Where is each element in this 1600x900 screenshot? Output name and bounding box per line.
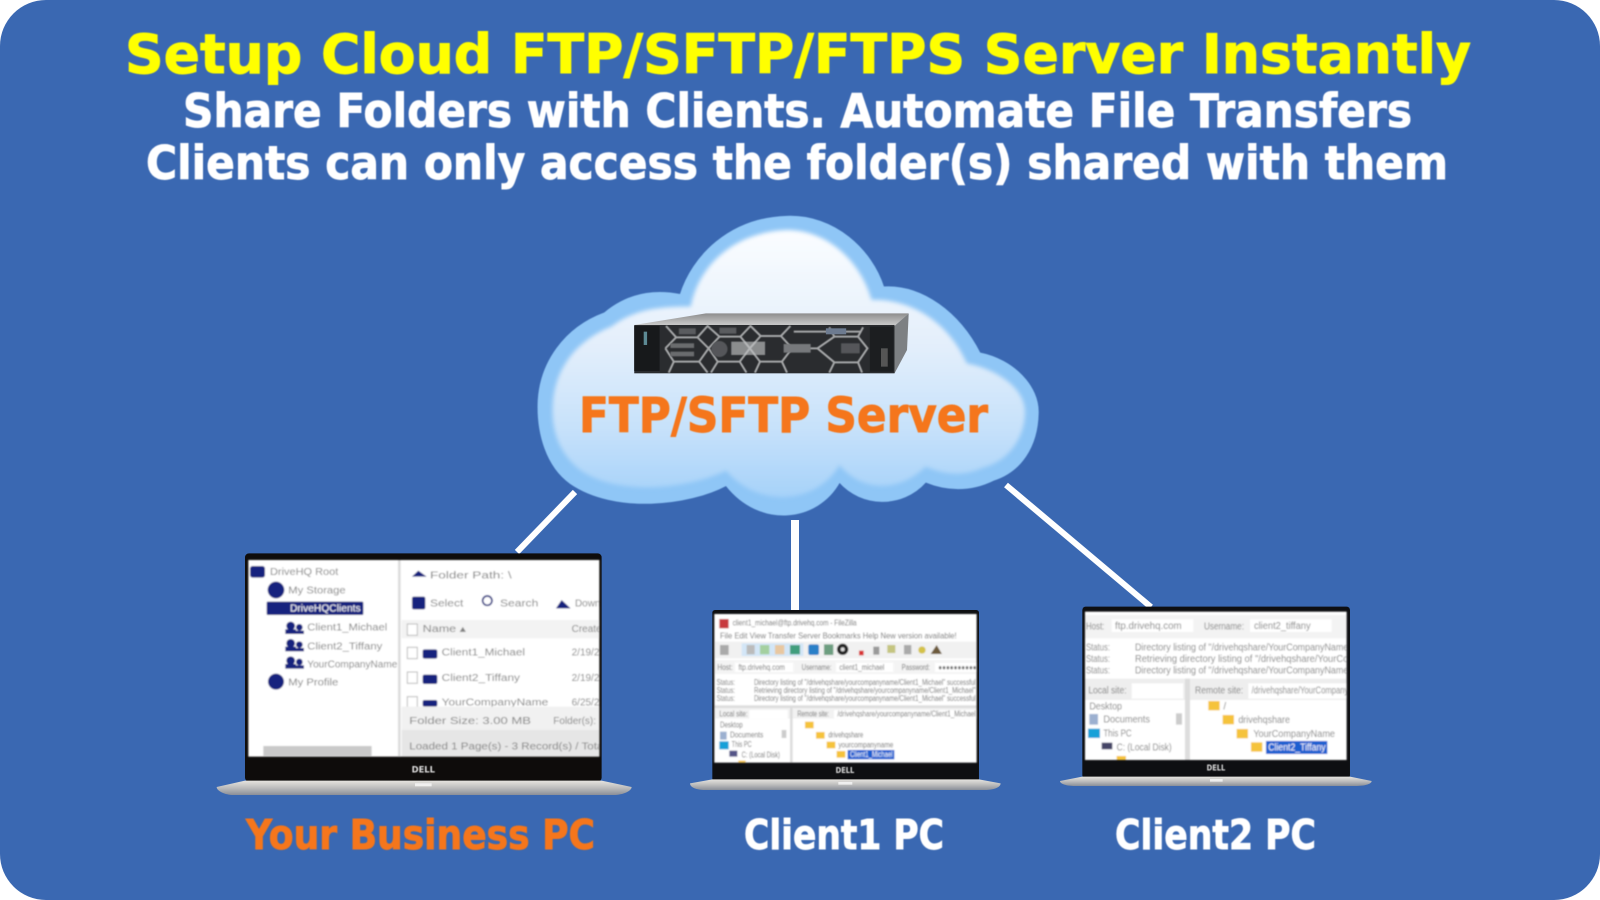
screen: FileZilla client2: This PC	[1103, 728, 1132, 739]
screen: FileZilla client1: Local site:	[719, 710, 748, 719]
connector: cloud to client2 PC	[1006, 485, 1151, 607]
screen: FileZilla client1: client1_michael	[839, 663, 884, 672]
screen: FileZilla client2: ftp.drivehq.com	[1115, 621, 1182, 632]
screen: FileZilla client2: Client2_Tiffany	[1268, 743, 1326, 754]
label: your business PC: Your Business PC	[245, 811, 595, 859]
screen: FileZilla client1: Remote site:	[797, 710, 829, 719]
screen: FileZilla client1: Client1_Michael	[850, 750, 893, 759]
subtitle: client access: Clients can only access the folder(s) shared with them	[146, 136, 1448, 190]
laptop body: DELL	[836, 766, 854, 775]
screen: FileZilla client2: Local site:	[1088, 685, 1127, 696]
laptop body	[690, 610, 1001, 790]
screen: FileZilla client2: Username:	[1204, 621, 1244, 632]
screen: FileZilla client1: Documents	[730, 730, 763, 739]
screen: file manager: YourCompanyName	[307, 659, 398, 670]
screen: FileZilla client2: Desktop	[1089, 701, 1122, 712]
screen: FileZilla client2: /	[1223, 701, 1226, 712]
screen: FileZilla client2	[1085, 612, 1349, 761]
screen: FileZilla client1: Retrieving directory listing of "/drivehqshare/yourcompanyname/Client1_Michael"	[754, 686, 976, 695]
cloud shape	[538, 217, 1038, 515]
laptop body	[217, 553, 632, 795]
screen: FileZilla client1: /drivehqshare/yourcompanyname/Client1_Michael	[837, 710, 976, 719]
title: Setup Cloud FTP/SFTP/FTPS Server Instantly	[125, 23, 1471, 86]
screen: FileZilla client2: C: (Local Disk)	[1117, 742, 1172, 753]
screen: FileZilla client2: client2_tiffany	[1254, 621, 1311, 632]
subtitle: share folders: Share Folders with Clients. Automate File Transfers	[183, 84, 1412, 138]
screen: FileZilla client2: Directory listing of "/drivehqshare/YourCompanyName	[1135, 665, 1349, 676]
screen: file manager: 2/19/2021	[572, 673, 616, 684]
laptop: your business PC	[217, 553, 632, 795]
screen: file manager: Loaded 1 Page(s) - 3 Record(s) / Total	[409, 741, 606, 752]
screen: FileZilla client1: Directory listing of "/drivehqshare/yourcompanyname/Client1_Michael" successful	[754, 678, 976, 687]
screen: FileZilla client2: Status:	[1086, 654, 1110, 665]
screen: file manager: YourCompanyName	[442, 698, 549, 709]
screen: FileZilla client1: ftp.drivehq.com	[738, 663, 785, 672]
screen: file manager: My Storage	[288, 585, 346, 596]
screen: file manager: Folder Path: \	[430, 570, 512, 581]
screen: FileZilla client2: /drivehqshare/YourCompany	[1252, 685, 1348, 696]
screen: FileZilla client2: Status:	[1086, 643, 1110, 654]
screen: FileZilla client1: yourcompanyname	[838, 740, 894, 749]
screen: file manager: Client1_Michael	[442, 648, 525, 659]
screen: FileZilla client1: Directory listing of "/drivehqshare/yourcompanyname/Client1_Michael" successful	[754, 694, 976, 703]
cloud with server	[538, 217, 1038, 515]
screen: FileZilla client1: Desktop	[720, 720, 743, 729]
laptop body	[1060, 607, 1372, 786]
screen: FileZilla client2: Remote site:	[1195, 685, 1243, 696]
screen: FileZilla client1: This PC	[732, 740, 752, 749]
screen: file manager: DriveHQ Root	[270, 567, 339, 578]
screen: file manager: DriveHQClients	[290, 604, 361, 615]
server	[634, 313, 909, 373]
screen: file manager: Search	[500, 599, 538, 610]
laptop body: DELL	[412, 765, 435, 775]
screen: file manager: Name ▴	[423, 624, 466, 635]
screen: FileZilla client1: Status:	[717, 678, 735, 687]
connector: cloud to business PC	[517, 492, 575, 552]
screen: file manager: 6/25/2021	[572, 698, 616, 709]
screen: FileZilla client1: drivehqshare	[828, 730, 864, 739]
screen: file manager: Client1_Michael	[307, 623, 387, 634]
screen: FileZilla client2: YourCompanyName	[1253, 729, 1335, 740]
screen: file manager: 2/19/2021	[572, 648, 616, 659]
screen: FileZilla client1: C: (Local Disk)	[742, 750, 780, 759]
screen: FileZilla client1: ●●●●●●●●●●	[938, 663, 977, 672]
screen: FileZilla client2: Directory listing of "/drivehqshare/YourCompanyName	[1135, 643, 1349, 654]
screen: file manager: Created	[572, 624, 607, 635]
screen: FileZilla client2: Status:	[1086, 665, 1110, 676]
cloud label: FTP/SFTP Server: FTP/SFTP Server	[579, 388, 988, 444]
screen: file manager: Download	[575, 599, 619, 610]
screen: FileZilla client2: Documents	[1103, 715, 1150, 726]
laptop: client2 PC	[1060, 607, 1372, 786]
screen: FileZilla client1: Host:	[717, 663, 733, 672]
connector: cloud to client1 PC	[791, 520, 799, 610]
laptop body: DELL	[1207, 764, 1225, 773]
laptop: client1 PC	[690, 610, 1001, 790]
label: client1 PC: Client1 PC	[744, 811, 944, 859]
screen: file manager: Folder Size: 3.00 MB	[409, 716, 531, 727]
screen: FileZilla client2: drivehqshare	[1238, 715, 1290, 726]
screen: FileZilla client2: Retrieving directory listing of "/drivehqshare/YourCo	[1135, 654, 1349, 665]
screen: FileZilla client1: client1_michael@ftp.drivehq.com - FileZilla	[733, 619, 857, 628]
screen: file manager: Client2_Tiffany	[442, 673, 520, 684]
screen: FileZilla client2: Host:	[1086, 621, 1104, 632]
screen: file manager	[248, 560, 619, 757]
screen: file manager: Select	[430, 599, 464, 610]
screen: FileZilla client1: File Edit View Transfer Server Bookmarks Help New version available!	[720, 632, 957, 641]
screen: FileZilla client1: Username:	[802, 663, 832, 672]
screen: FileZilla client1: Password:	[902, 663, 930, 672]
screen: file manager: My Profile	[288, 678, 339, 689]
screen: FileZilla client1	[714, 614, 977, 764]
label: client2 PC: Client2 PC	[1115, 811, 1316, 859]
screen: FileZilla client1: Status:	[717, 686, 735, 695]
screen: file manager: Client2_Tiffany	[307, 641, 382, 652]
screen: FileZilla client1: Status:	[717, 694, 735, 703]
screen: file manager: Folder(s): 3	[553, 716, 605, 727]
